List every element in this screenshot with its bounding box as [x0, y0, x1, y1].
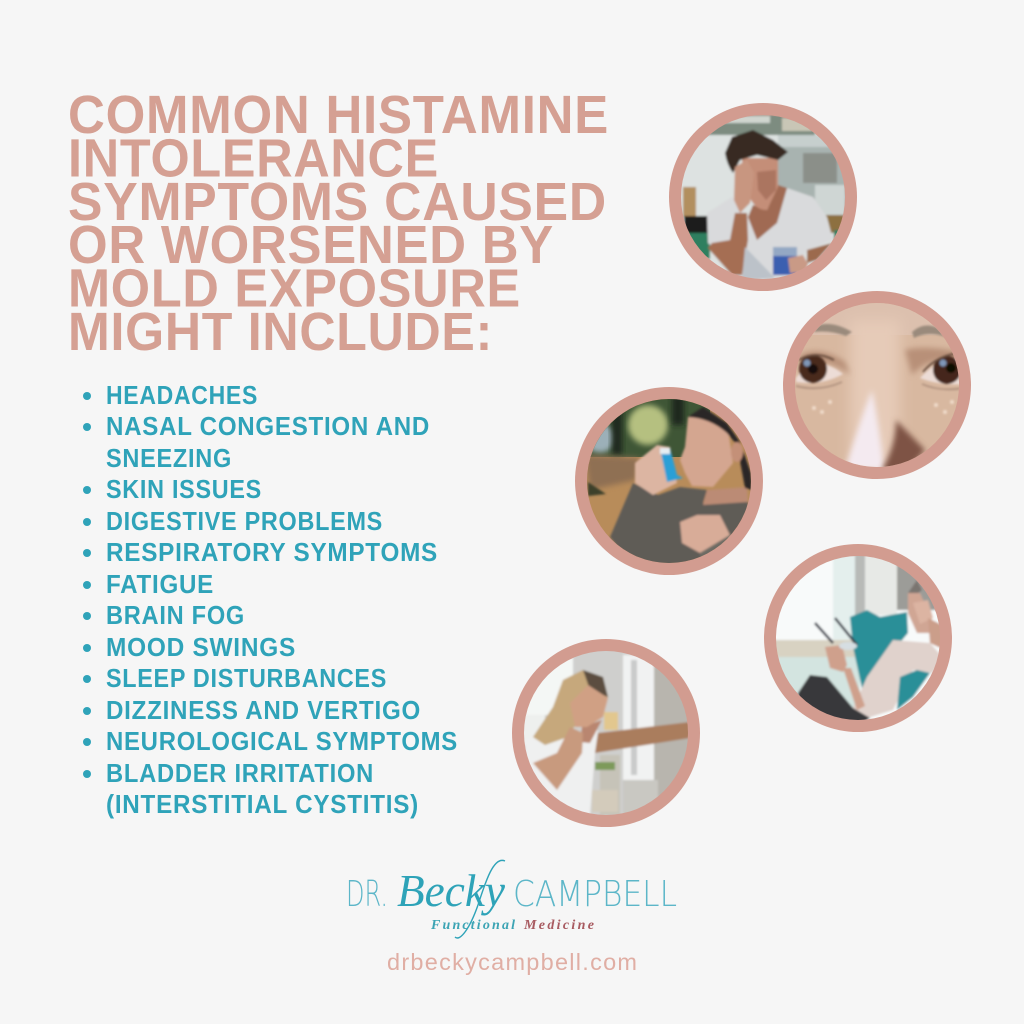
symptom list: DIGESTIVE PROBLEMS	[106, 506, 383, 536]
symptom list: SNEEZING	[106, 443, 232, 473]
symptom list: SLEEP DISTURBANCES	[106, 663, 387, 693]
title: COMMON HISTAMINE	[68, 85, 609, 145]
photo: man with headache	[669, 103, 857, 291]
symptom list: DIZZINESS AND VERTIGO	[106, 695, 421, 725]
logo: Dr. Becky Campbell Functional Medicine: CAMPBELL	[513, 874, 677, 915]
website url: drbeckycampbell.com	[387, 949, 637, 975]
logo: Dr. Becky Campbell Functional Medicine	[346, 860, 677, 938]
logo: Dr. Becky Campbell Functional Medicine: Becky	[397, 865, 506, 916]
title: MOLD EXPOSURE	[68, 258, 521, 318]
symptom list: SKIN ISSUES	[106, 474, 262, 504]
logo: Dr. Becky Campbell Functional Medicine: Medicine	[523, 918, 594, 933]
title	[68, 85, 609, 362]
logo: Dr. Becky Campbell Functional Medicine: DR.	[346, 874, 388, 915]
title: OR WORSENED BY	[68, 215, 554, 275]
photo: woman with inhaler	[575, 387, 763, 575]
symptom list: (INTERSTITIAL CYSTITIS)	[106, 789, 419, 819]
symptom list: HEADACHES	[106, 380, 258, 410]
symptom list: RESPIRATORY SYMPTOMS	[106, 537, 438, 567]
symptom list: FATIGUE	[106, 569, 214, 599]
photo: woman rubbing eyes holding glasses	[764, 544, 952, 732]
symptom list: BRAIN FOG	[106, 600, 245, 630]
photo: dizzy woman leaning on wall	[512, 639, 700, 827]
symptom list	[83, 380, 458, 819]
symptom list: BLADDER IRRITATION	[106, 758, 374, 788]
title: SYMPTOMS CAUSED	[68, 172, 607, 232]
title: INTOLERANCE	[68, 128, 439, 188]
title: MIGHT INCLUDE:	[68, 302, 493, 362]
photo: eyes with skin bumps	[783, 291, 971, 479]
symptom list: NEUROLOGICAL SYMPTOMS	[106, 726, 458, 756]
symptom list: MOOD SWINGS	[106, 632, 296, 662]
logo: Dr. Becky Campbell Functional Medicine: Functional	[430, 918, 515, 933]
symptom list: NASAL CONGESTION AND	[106, 411, 430, 441]
